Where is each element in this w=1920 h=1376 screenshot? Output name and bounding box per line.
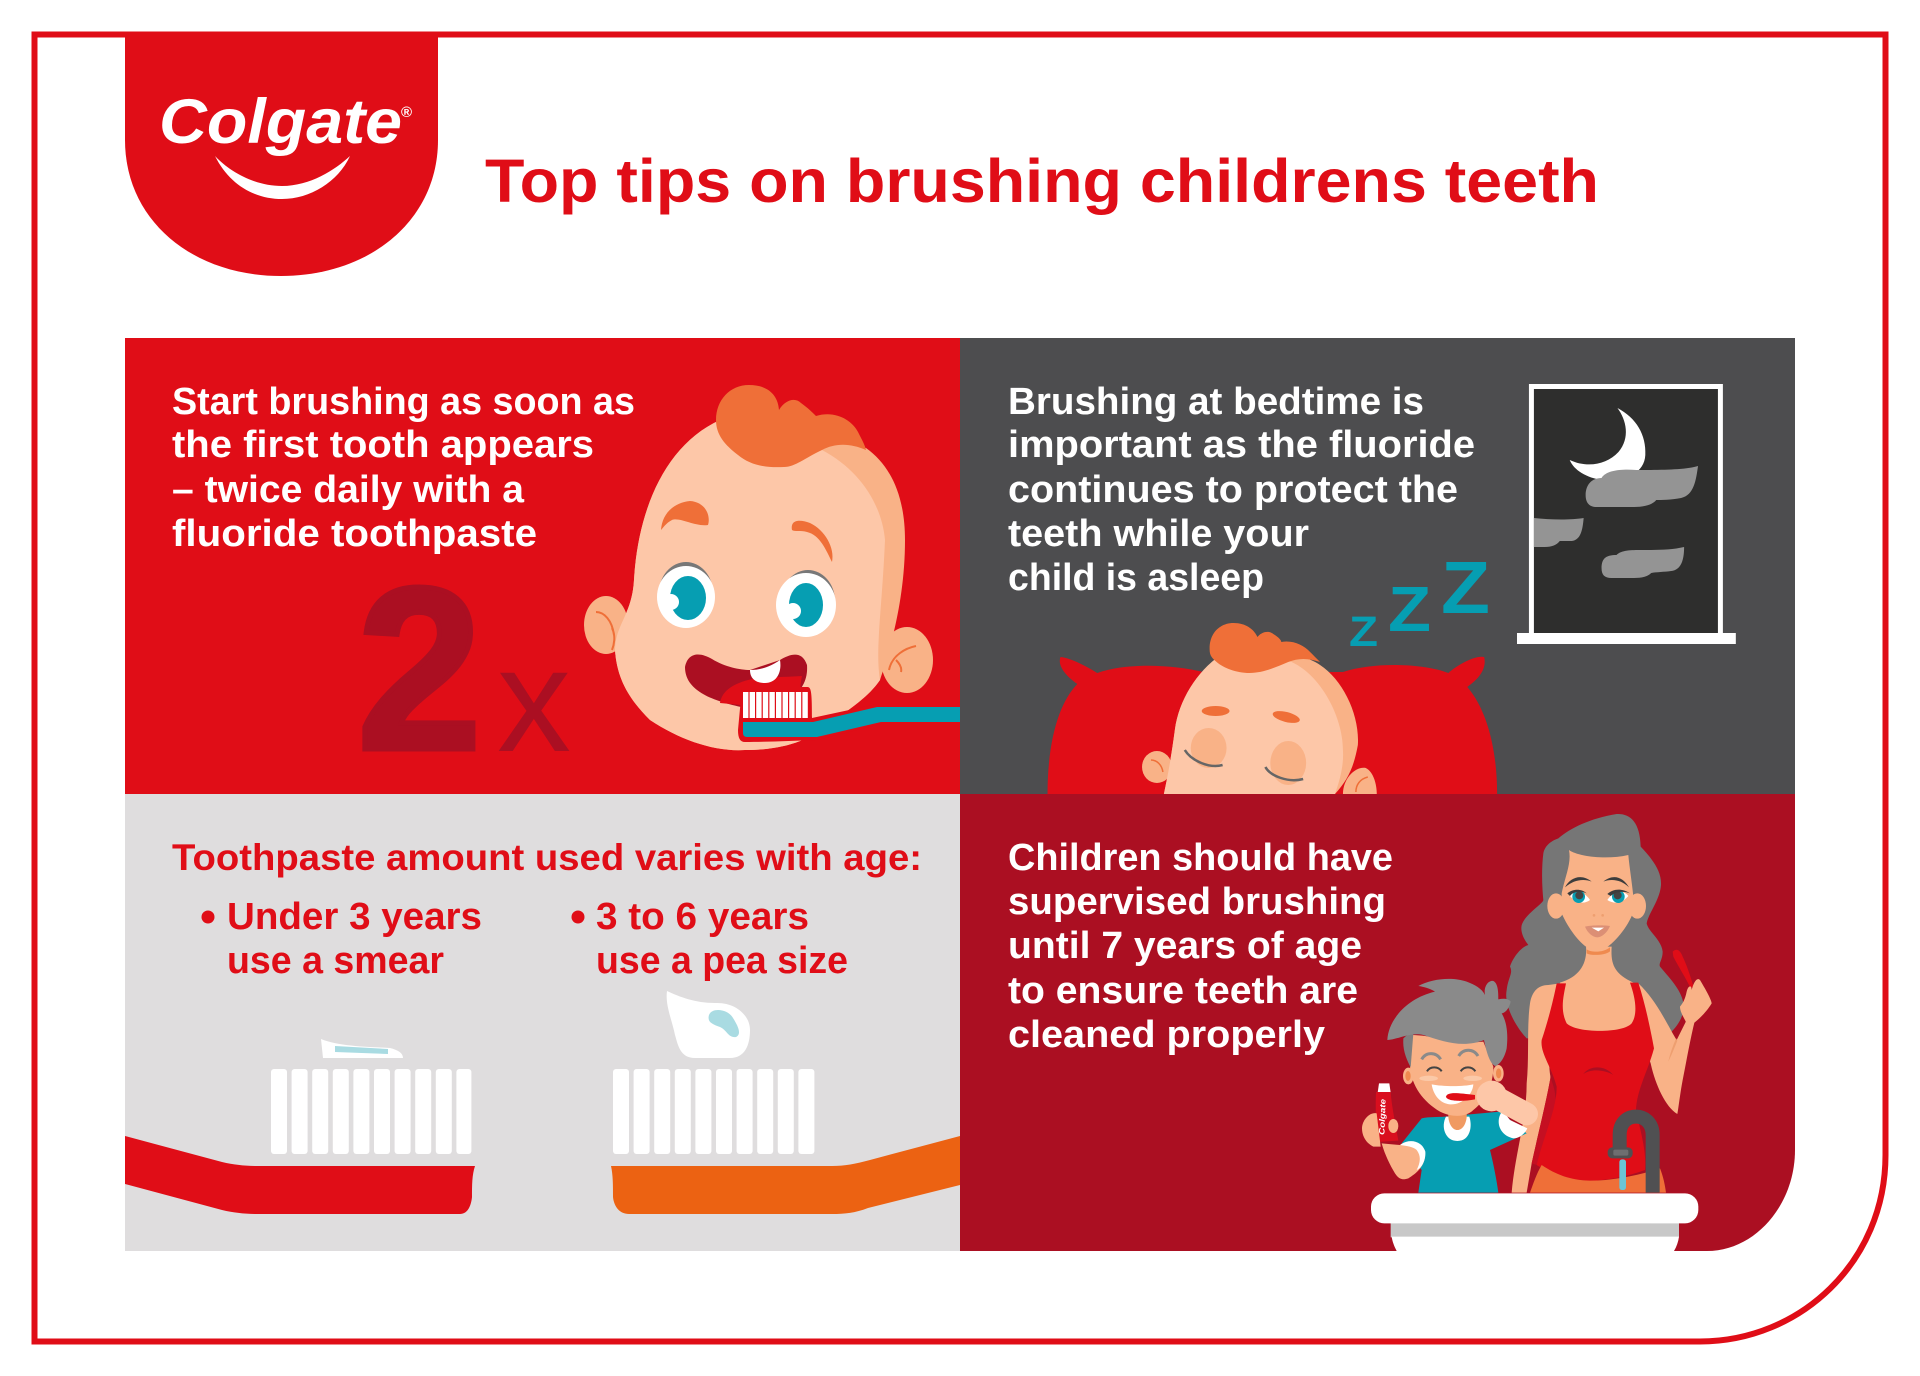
text block: start brushing: – twice daily with a	[172, 469, 525, 511]
toothpaste tube: Colgate	[1377, 1098, 1388, 1135]
chest and neck	[1553, 947, 1642, 1033]
faucet	[1608, 1117, 1653, 1193]
cuff and forearm	[1499, 1111, 1527, 1138]
ears	[1403, 1068, 1414, 1084]
child	[1362, 979, 1527, 1193]
text block: under 3 years	[202, 896, 482, 982]
big 2x	[357, 540, 571, 799]
title: Top tips on brushing childrens teeth	[485, 147, 1599, 215]
face	[1410, 1035, 1493, 1116]
text block: under 3 years: use a smear	[227, 940, 444, 982]
text block: start brushing: the first tooth appears	[172, 424, 594, 466]
text block: supervised: cleaned properly	[1008, 1014, 1325, 1056]
logo: Colgate shield	[125, 32, 438, 276]
shirt	[1402, 1112, 1527, 1193]
text block: 3 to 6 years: 3 to 6 years	[596, 896, 809, 938]
text block: supervised: to ensure teeth are	[1008, 970, 1358, 1012]
toothpaste tube	[1376, 1083, 1398, 1142]
panel: supervised brushing	[960, 794, 1795, 1251]
arm holding tube	[1382, 1143, 1425, 1179]
text block: bedtime: child is asleep	[1008, 557, 1264, 599]
icon: pea of toothpaste	[667, 991, 750, 1058]
sink	[1371, 1193, 1698, 1251]
text block: bedtime: important as the fluoride	[1008, 424, 1475, 466]
text block: supervised: Children should have	[1008, 837, 1393, 879]
right arm	[1633, 983, 1695, 1114]
text block: supervised: supervised brushing	[1008, 881, 1386, 923]
left arm	[1512, 983, 1560, 1193]
icon: baby brushing	[584, 385, 960, 750]
tank top	[1537, 983, 1654, 1181]
icon: mother and child at sink	[1362, 814, 1712, 1251]
hair	[1403, 1033, 1413, 1067]
text block: start brushing: Start brushing as soon as	[172, 381, 635, 423]
panel: toothpaste amount	[125, 794, 960, 1251]
mother	[1506, 814, 1712, 1193]
icon: zzz: Z	[1349, 608, 1378, 656]
collar	[1444, 1117, 1471, 1141]
mother toothbrush	[1673, 950, 1693, 988]
eye right	[776, 570, 836, 637]
icon: zzz: Z	[1441, 546, 1490, 629]
icon: zzz	[1349, 546, 1490, 656]
eye left	[657, 562, 715, 628]
icon: orange toothbrush	[611, 1069, 960, 1214]
mouth and tooth	[685, 654, 807, 707]
icon: smear of toothpaste	[321, 1039, 403, 1058]
hand	[1680, 979, 1712, 1023]
icon: baby toothbrush	[738, 687, 960, 742]
logo: Colgate shield: ®	[401, 104, 412, 121]
icon: pillow	[1048, 657, 1497, 794]
heading: toothpaste amount: Toothpaste amount used varies with age:	[172, 837, 922, 878]
big 2x: x	[497, 618, 571, 783]
text block: supervised: until 7 years of age	[1008, 925, 1362, 967]
icon: night window	[1517, 384, 1736, 644]
icon: red toothbrush	[125, 1069, 475, 1214]
panel: bedtime brushing	[960, 338, 1795, 794]
hair	[1506, 814, 1684, 1038]
text block: bedtime: continues to protect the	[1008, 469, 1458, 511]
mother head	[1547, 850, 1646, 955]
icon: zzz: Z	[1388, 573, 1431, 645]
text block: supervised	[1008, 837, 1393, 1056]
text block: 3 to 6 years	[572, 896, 848, 982]
text block: bedtime	[1008, 381, 1475, 599]
icon: sleeping baby	[1142, 623, 1377, 794]
trousers	[1530, 1165, 1666, 1193]
big 2x: 2	[357, 540, 482, 799]
text block: start brushing: fluoride toothpaste	[172, 513, 537, 555]
face details	[1422, 1054, 1441, 1059]
panel: start brushing	[125, 338, 960, 799]
logo: Colgate shield: Colgate	[159, 87, 402, 157]
text block: 3 to 6 years: use a pea size	[596, 940, 848, 982]
text block: bedtime: teeth while your	[1008, 513, 1309, 555]
text block: bedtime: Brushing at bedtime is	[1008, 381, 1424, 423]
text block: start brushing	[172, 381, 635, 555]
text block: under 3 years: Under 3 years	[227, 896, 482, 938]
